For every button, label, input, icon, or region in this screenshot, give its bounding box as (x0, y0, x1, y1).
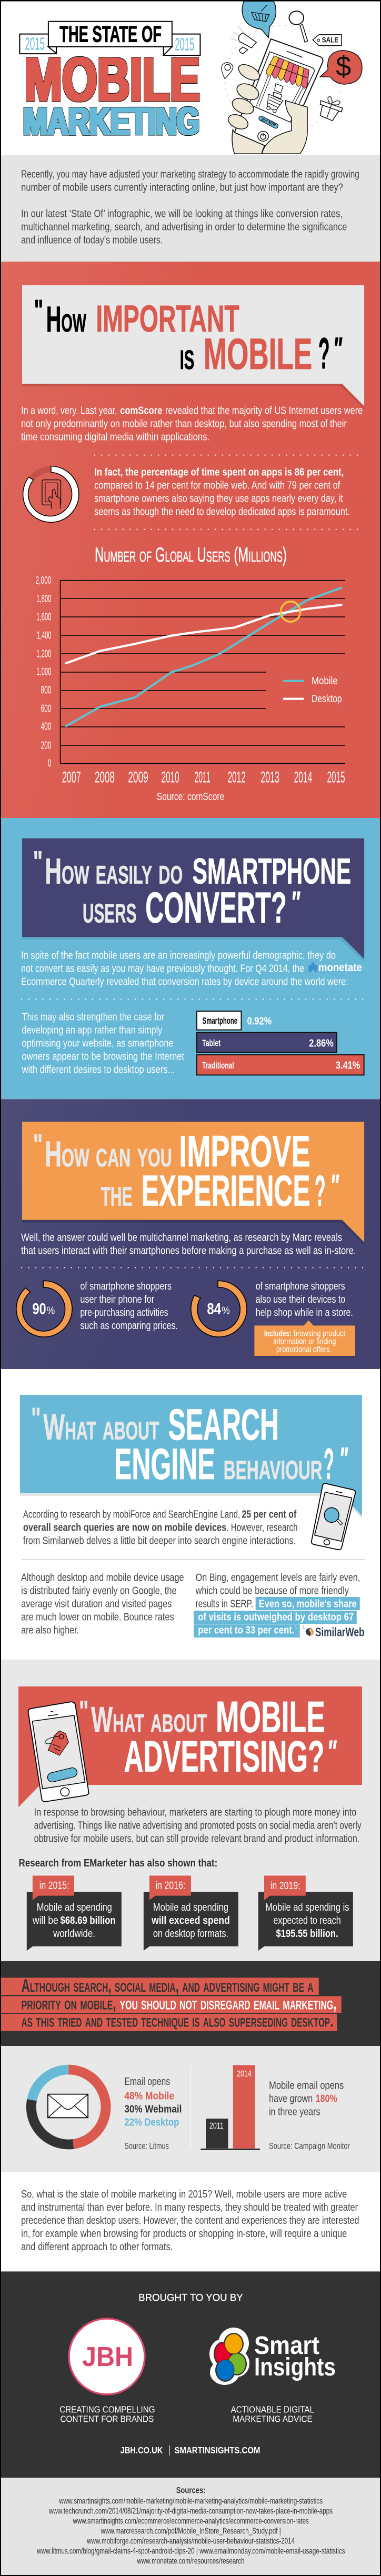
callout: includes (254, 1320, 355, 1357)
bar chart: conversion rates: Smartphone (203, 1015, 237, 1026)
explanatory text: developing an app rather than simply (22, 1024, 163, 1036)
speech bubble heading: " (330, 1169, 339, 1204)
callout: includes: information or finding (273, 1336, 336, 1346)
body text: In a word, very. Last year, (21, 405, 117, 417)
stat: 90 percent: % (47, 1305, 55, 1317)
card: 2015: in 2015: (39, 1880, 69, 1891)
speech bubble heading: ENGINE (114, 1440, 215, 1489)
line chart: global users: 2007 (62, 768, 81, 786)
speech bubble heading: " (290, 885, 300, 921)
tagline: JBH (59, 2404, 155, 2424)
speech bubble heading (22, 838, 364, 962)
email opens text: 48% Mobile (124, 2090, 174, 2102)
email opens text: Source: Litmus (124, 2142, 169, 2151)
heading: brought to you by: BROUGHT TO YOU BY (138, 2292, 243, 2303)
line chart: global users: 800 (41, 684, 51, 696)
line chart: global users: 2010 (162, 768, 179, 786)
tagline: Smart Insights: ACTIONABLE DIGITAL (231, 2404, 314, 2414)
callout: includes: browsing product (294, 1329, 346, 1338)
tagline: Smart Insights (231, 2404, 314, 2424)
panel: email statistics (0, 2046, 381, 2172)
panel: how easily do smartphone users convert (0, 818, 381, 1099)
illustration: hand holding phone with shopping icons: BUY NOW (260, 117, 277, 127)
speech bubble heading: IS (180, 345, 194, 375)
tagline: Smart Insights: MARKETING ADVICE (233, 2414, 313, 2424)
body text (34, 1806, 362, 1844)
sources heading: Sources: (176, 2486, 206, 2495)
banner text: priority on mobile, (22, 1993, 116, 2013)
stat: 90 percent: 90 (32, 1300, 46, 1317)
callout: includes: Includes: (264, 1329, 292, 1338)
illustration: hand holding phone with shopping icons (222, 1, 362, 154)
column text: bing (194, 1572, 360, 1638)
explanatory text: This may also strengthen the case for (22, 1011, 164, 1023)
sources list: www.monetate.com/resources/research (137, 2557, 244, 2565)
icon: tablet touch ring (23, 466, 79, 522)
panel: how important is mobile (0, 262, 381, 818)
line chart: global users: Mobile (312, 675, 338, 687)
speech bubble heading: " (31, 1402, 41, 1435)
body text: comScore (120, 405, 162, 417)
title: marketing: MARKETING (23, 99, 199, 143)
banner text (22, 1975, 336, 2031)
logo: Smart Insights: Insights (254, 2353, 336, 2381)
body text (21, 1232, 356, 1256)
line chart: global users: 2011 (194, 768, 210, 786)
card: 2015: $68.69 billion (61, 1915, 116, 1926)
body text: 25 per cent of (242, 1509, 297, 1520)
title: mobile: MOBILE (25, 45, 200, 114)
title ribbon: 2015 (25, 34, 45, 54)
explanatory text: owners appear to be browsing the Internet (22, 1051, 184, 1062)
tagline: JBH: CREATING COMPELLING (59, 2404, 155, 2414)
speech bubble heading: " (34, 294, 43, 327)
speech bubble heading (20, 1395, 362, 1519)
conclusion text (21, 2189, 359, 2253)
website links: SMARTINSIGHTS.COM (175, 2445, 260, 2455)
logo: similarweb: 1 (303, 1624, 305, 1630)
explanatory text (22, 1011, 184, 1075)
line chart: global users: 1,400 (37, 630, 51, 641)
card: 2019: $195.55 billion. (276, 1928, 338, 1940)
email growth text (269, 2080, 350, 2151)
speech bubble heading: " (333, 331, 343, 366)
column text: google (21, 1572, 184, 1636)
speech bubble heading: " (79, 1694, 89, 1728)
speech bubble heading: What about (43, 1406, 159, 1447)
stat: 90 percent: user their phone for (80, 1294, 154, 1305)
email growth text: have grown (269, 2093, 313, 2104)
bar chart: mobile email growth: 2011 (209, 2121, 224, 2131)
bar chart: mobile email growth (200, 2065, 260, 2149)
speech bubble heading: " (327, 1734, 337, 1770)
donut chart: email opens (26, 2065, 111, 2149)
stat: 90 percent: pre-purchasing activities (80, 1307, 168, 1319)
panel: brought to you by (0, 2271, 381, 2478)
body text: time consuming digital media within applications. (21, 431, 209, 443)
card: 2016: will exceed spend (151, 1915, 230, 1926)
panel: intro (0, 155, 381, 262)
card: 2015: will be (32, 1915, 58, 1926)
explanatory text: with different desires to desktop users... (22, 1064, 175, 1075)
column text: google: is distributed fairly evenly on Google, the (21, 1585, 177, 1596)
speech bubble heading: " (33, 845, 43, 878)
logo: monetate (308, 962, 362, 974)
panel: header (0, 0, 381, 155)
panel: what about search engine behaviour (0, 1369, 381, 1660)
line chart: global users: 2013 (260, 768, 279, 786)
logo: Smart Insights: Smart (254, 2332, 319, 2360)
speech bubble heading (22, 285, 364, 409)
tagline: JBH: CONTENT FOR BRANDS (61, 2414, 154, 2424)
line chart: global users: 600 (41, 703, 51, 715)
title ribbon: 2015 (175, 35, 194, 55)
bar chart: mobile email growth: 2014 (237, 2069, 252, 2079)
speech bubble heading: ? (315, 1166, 326, 1215)
email growth text: 180% (316, 2093, 337, 2104)
card: 2015: Mobile ad spending (37, 1902, 112, 1913)
email opens text: Email opens (124, 2076, 170, 2088)
title ribbon: THE STATE OF (59, 22, 162, 47)
body text (23, 1509, 298, 1546)
title ribbon (19, 22, 200, 55)
speech bubble heading: " (339, 1441, 348, 1476)
body text: overall search queries are now on mobile devices (23, 1522, 226, 1533)
line chart: global users: 1,000 (36, 666, 51, 678)
card: 2016: on desktop formats. (153, 1928, 228, 1940)
bar chart: conversion rates (197, 1011, 364, 1075)
explanatory text: optimising your website, as smartphone (22, 1037, 174, 1049)
card: 2015: worldwide. (53, 1928, 95, 1940)
bar chart: conversion rates: Traditional (202, 1060, 234, 1071)
panel: conclusion (0, 2172, 381, 2271)
stat: 90 percent: such as comparing prices. (80, 1320, 178, 1332)
illustration: hand holding phone with shopping icons: SALE (322, 36, 338, 44)
card: 2019 (258, 1875, 353, 1951)
column text: bing: results in SERP. (196, 1598, 253, 1610)
stat: 90 percent: of smartphone shoppers (80, 1281, 172, 1292)
card: 2015 (27, 1875, 122, 1951)
panel: how can you improve the experience (0, 1099, 381, 1369)
speech bubble heading: What about (91, 1700, 207, 1740)
panel: sources (0, 2478, 381, 2576)
stat: 84 percent (191, 1281, 353, 1337)
column text: google: Although desktop and mobile device usage (21, 1572, 184, 1583)
icon: phone with magnifier (312, 1483, 355, 1550)
intro text (21, 168, 359, 246)
email growth text: in three years (269, 2106, 320, 2118)
speech bubble heading: THE (101, 1182, 133, 1212)
speech bubble heading: How (46, 299, 86, 340)
column text: bing: 1 (295, 1624, 297, 1630)
speech bubble heading (22, 1122, 364, 1245)
icon: phone with price tag (28, 1702, 89, 1802)
card: 2016: Mobile ad spending (153, 1902, 228, 1913)
body text (21, 950, 348, 988)
speech bubble heading: How easily do (45, 851, 183, 891)
body text: . However, research (226, 1522, 298, 1533)
line chart: global users: 2012 (228, 768, 246, 786)
card: 2016: in 2016: (155, 1880, 185, 1891)
logo: similarweb (303, 1624, 365, 1639)
illustration: hand holding phone with shopping icons: $ (336, 51, 351, 83)
bar chart: conversion rates: 3.41% (336, 1060, 360, 1072)
line chart: global users: 400 (41, 721, 51, 733)
column text: google: are much lower on mobile. Bounce rates (21, 1611, 174, 1623)
email opens text: 30% Webmail (124, 2103, 182, 2115)
conclusion text: and different approach to other formats. (21, 2241, 173, 2253)
card: 2019: in 2019: (270, 1880, 300, 1892)
stat: 84 percent: % (222, 1305, 230, 1317)
stat: 90 percent (16, 1281, 178, 1337)
sources list (37, 2497, 345, 2565)
panel: email marketing banner (0, 1961, 381, 2046)
bar chart: conversion rates: 2.86% (309, 1037, 334, 1049)
logo: JBH (69, 2319, 145, 2394)
line chart: global users: 0 (48, 757, 51, 770)
speech bubble heading: How can you (45, 1134, 172, 1174)
research subheading: Research from EMarketer has also shown that: (19, 1858, 217, 1869)
card: 2016 (144, 1875, 238, 1951)
website links: JBH.CO.UK (121, 2445, 163, 2455)
line chart: global users: Desktop (312, 693, 342, 705)
line chart: global users: 1,800 (36, 593, 51, 605)
body text (21, 405, 363, 443)
logo: JBH: JBH (82, 2342, 133, 2372)
speech bubble heading (18, 1686, 362, 1807)
line chart: global users: 2008 (95, 768, 115, 786)
line chart: global users: Source: comScore (157, 791, 224, 803)
speech bubble heading: USERS (83, 898, 136, 928)
line chart: global users: 2,000 (35, 575, 51, 586)
logo: Smart Insights (209, 2328, 336, 2385)
panel: what about mobile advertising (0, 1660, 381, 1961)
line chart: global users: 1,600 (36, 611, 51, 623)
email opens text (124, 2076, 182, 2151)
stat: 84 percent: 84 (207, 1300, 221, 1317)
email opens text: 22% Desktop (124, 2116, 179, 2128)
line chart: global users: 1,200 (36, 648, 51, 660)
website links (121, 2445, 260, 2455)
line chart: global users (35, 575, 345, 803)
line chart: global users: 2014 (294, 768, 312, 786)
speech bubble heading: ? (324, 1440, 334, 1489)
bar chart: conversion rates: Tablet (202, 1037, 220, 1049)
panel: how important is mobile: 2015 (327, 768, 345, 786)
intro text: and influence of today’s mobile users. (21, 234, 163, 246)
bar chart: conversion rates: 0.92% (247, 1015, 272, 1027)
line chart: global users: 2009 (128, 768, 148, 786)
column text: google: average visit duration and visited pages (21, 1598, 172, 1610)
speech bubble heading: ? (318, 329, 330, 378)
column text: bing: per cent to 33 per cent. (198, 1624, 295, 1636)
app usage text (94, 466, 350, 517)
column text: google: are also higher. (21, 1624, 79, 1636)
callout: includes: promotional offers. (276, 1344, 332, 1354)
line chart: global users: 200 (41, 740, 51, 751)
speech bubble heading: " (33, 1128, 43, 1162)
